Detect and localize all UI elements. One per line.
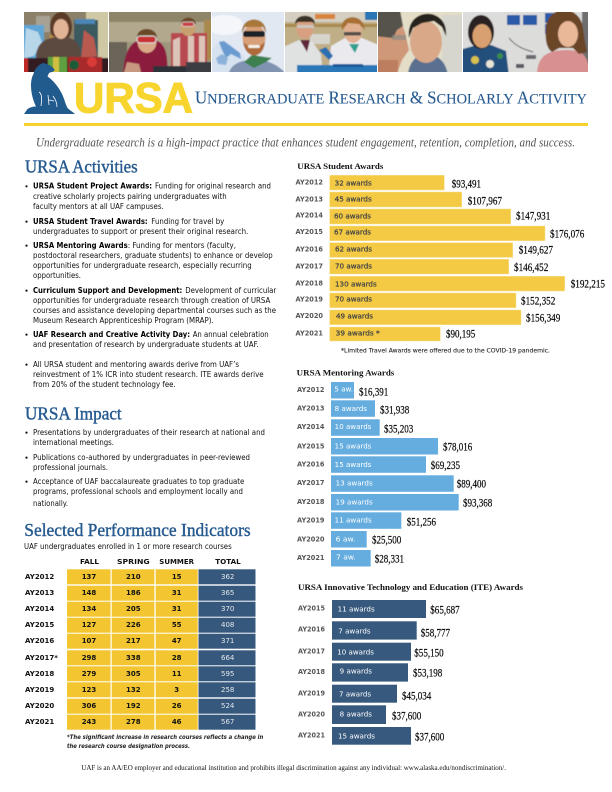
photo: lab researchers with pipette — [285, 12, 377, 72]
heading: Selected Performance Indicators: Selected Performance Indicators — [24, 520, 251, 540]
bullet: funding sources: reinvestment of 1% ICR into student research. ITE awards derive — [33, 370, 264, 379]
bar AY2013: 8 awards — [335, 405, 367, 413]
table row AY2020: AY2020 — [25, 702, 54, 710]
photo: two students at research poster — [463, 12, 588, 72]
bullet: research and creative activity day: and presentation of research by undergraduate students at UAF. — [33, 340, 259, 349]
table row AY2016: 217 — [126, 637, 141, 645]
table row AY2016: 371 — [221, 637, 234, 645]
bullet: acceptance: Acceptance of UAF baccalaureate graduates to top graduate — [33, 477, 245, 486]
bar AY2016: AY2016 — [298, 626, 325, 634]
bar AY2018 — [297, 494, 492, 510]
table row AY2017 — [25, 650, 256, 665]
bar AY2018 — [296, 276, 605, 291]
table row AY2020: 306 — [82, 702, 96, 710]
table row AY2018: 305 — [126, 670, 141, 678]
bar AY2017: 70 awards — [335, 262, 372, 270]
bullet: student project awards: creative scholarly projects pairing undergraduates with — [33, 192, 227, 201]
table row AY2015: 408 — [221, 621, 234, 629]
table row AY2014 — [25, 602, 256, 617]
table row AY2015: AY2015 — [25, 621, 54, 629]
table row AY2018: 279 — [82, 670, 96, 678]
table row AY2016: 107 — [82, 637, 96, 645]
icon: bear silhouette — [24, 63, 75, 114]
subheading: UAF undergraduates enrolled in 1 or more research courses — [24, 542, 232, 551]
bar AY2015: $65,687 — [430, 603, 460, 617]
wordmark: URSA: URSA — [74, 74, 193, 122]
bar AY2015: 11 awards — [338, 605, 375, 613]
bar AY2017 — [296, 259, 548, 274]
bar AY2014: $35,203 — [384, 422, 413, 436]
bullet: curriculum support: Museum Research Apprenticeship Program (MRAP). — [33, 316, 214, 325]
table column headers: SPRING — [117, 558, 150, 566]
bar AY2017: $55,150 — [414, 645, 444, 659]
table row AY2016 — [25, 634, 256, 649]
bullet: publications: Publications co-authored by undergraduates in peer-reviewed — [33, 453, 250, 462]
table row AY2018: 595 — [221, 670, 234, 678]
table row AY2012: 137 — [82, 573, 96, 581]
bar AY2013: AY2013 — [297, 404, 325, 412]
table row AY2012: 210 — [126, 573, 141, 581]
bullet: acceptance — [25, 477, 245, 508]
bar AY2014 — [297, 419, 413, 436]
bar AY2016: 62 awards — [335, 245, 372, 253]
bullet: mentoring awards: opportunities. — [33, 271, 81, 280]
bar AY2021: $28,331 — [375, 552, 404, 566]
table row AY2021: 278 — [126, 718, 141, 726]
bullet: student travel awards — [25, 217, 248, 236]
table row AY2020: 26 — [172, 702, 182, 710]
bar AY2021: AY2021 — [297, 554, 325, 562]
table row AY2015: 127 — [82, 621, 96, 629]
panel: URSA Activities — [25, 157, 277, 389]
bar AY2013 — [296, 192, 502, 208]
bar AY2014: $147,931 — [516, 208, 550, 222]
bar AY2017: 10 awards — [337, 648, 374, 656]
bar AY2016: $69,235 — [431, 458, 460, 472]
table row AY2016: 47 — [172, 637, 182, 645]
bullet: presentations: Presentations by undergraduates of their research at national and — [33, 428, 265, 437]
title: Undergraduate Research & Scholarly Activity: UNDERGRADUATE RESEARCH & SCHOLARLY ACTIVITY — [195, 88, 587, 108]
bar AY2012: 5 aw. — [334, 385, 353, 393]
bullet: curriculum support: Development of curricular — [185, 286, 277, 295]
table row AY2021 — [25, 715, 256, 730]
bullet: presentations: international meetings. — [33, 438, 114, 447]
bar AY2015: AY2015 — [297, 442, 325, 450]
bar AY2021: 39 awards * — [336, 329, 380, 337]
bullet: funding sources: from 20% of the student technology fee. — [33, 380, 176, 389]
bar AY2019: 70 awards — [335, 295, 372, 303]
bar AY2016: AY2016 — [297, 460, 325, 468]
bar AY2015: $176,076 — [550, 227, 584, 241]
bar AY2020: $156,349 — [526, 310, 560, 324]
bullet: curriculum support: courses and assistance developing departmental courses such as the — [33, 306, 276, 315]
table row AY2014: 31 — [172, 605, 182, 613]
chart title: URSA Student Awards — [297, 161, 384, 171]
bar AY2016 — [297, 456, 460, 473]
bullet: acceptance: nationally. — [33, 499, 68, 508]
bar AY2018: AY2018 — [297, 498, 325, 506]
bar AY2015: $78,016 — [443, 440, 472, 454]
bar AY2019: 11 awards — [335, 516, 372, 524]
table row AY2016: AY2016 — [25, 637, 54, 645]
table row AY2020: 524 — [221, 702, 235, 710]
panel: Selected Performance Indicators — [24, 520, 264, 750]
heading: URSA Impact: URSA Impact — [25, 403, 122, 423]
bullet: student travel awards: Funding for travel by — [151, 217, 225, 226]
bar AY2013: AY2013 — [296, 195, 323, 203]
table row AY2012: AY2012 — [25, 573, 54, 581]
bar AY2014: 60 awards — [334, 212, 371, 220]
table row AY2014: 205 — [126, 605, 141, 613]
bar AY2017: 13 awards — [336, 479, 373, 487]
bar AY2018 — [298, 663, 442, 682]
bar AY2021: AY2021 — [296, 329, 323, 337]
panel: URSA Impact — [25, 403, 265, 508]
photo: man in sunglasses with snowy mountain — [212, 12, 284, 72]
bullet: student project awards — [25, 182, 271, 211]
table row AY2014: 134 — [82, 605, 96, 613]
bar AY2017 — [298, 643, 444, 661]
chart: URSA Mentoring Awards — [297, 367, 492, 566]
table row AY2013: AY2013 — [25, 589, 54, 597]
chart title: URSA Mentoring Awards — [297, 367, 395, 377]
bullet: research and creative activity day: An annual celebration — [193, 330, 269, 339]
table row AY2015 — [25, 618, 256, 633]
bar AY2019: $51,256 — [407, 514, 436, 528]
bar AY2014: AY2014 — [297, 423, 325, 431]
bar AY2016: $149,627 — [519, 243, 553, 257]
bar AY2020: 8 awards — [340, 710, 372, 718]
chart title: URSA Innovative Technology and Education (ITE) Awards — [298, 582, 524, 592]
bar AY2019: $45,034 — [402, 688, 431, 702]
table row AY2015: 55 — [172, 621, 182, 629]
bar AY2013 — [297, 400, 409, 417]
bar AY2016: $58,777 — [421, 625, 450, 639]
table row AY2017: 298 — [82, 654, 96, 662]
table row AY2013: 365 — [221, 589, 234, 597]
bar AY2018: 19 awards — [336, 498, 373, 506]
table row AY2017: 664 — [221, 654, 235, 662]
bar AY2013: $107,967 — [468, 194, 502, 208]
bullet: mentoring awards: opportunities for undergraduate research, especially recurring — [33, 261, 252, 270]
bar AY2015: AY2015 — [296, 228, 323, 236]
bar AY2018: $53,198 — [413, 665, 442, 679]
bar AY2019: AY2019 — [297, 516, 325, 524]
table row AY2018: 11 — [172, 670, 182, 678]
bar AY2021 — [298, 727, 444, 745]
bar AY2021: $90,195 — [446, 327, 475, 341]
table row AY2013: 186 — [126, 589, 141, 597]
chart: URSA Innovative Technology and Education Awards — [298, 582, 524, 745]
bar AY2015: AY2015 — [298, 604, 325, 612]
bar AY2017: $89,400 — [457, 477, 486, 491]
bullet: student travel awards: URSA Student Travel Awards: — [33, 217, 148, 226]
table row AY2019 — [25, 682, 256, 697]
bar AY2018: AY2018 — [298, 668, 325, 676]
bar AY2019: 7 awards — [339, 690, 371, 698]
bullet: presentations — [25, 428, 265, 447]
photo: student artist with paintings — [24, 12, 108, 72]
bar AY2016: AY2016 — [296, 245, 323, 253]
bar AY2018: 9 awards — [340, 667, 372, 675]
table row AY2014: AY2014 — [25, 605, 54, 613]
bar AY2020: AY2020 — [297, 535, 325, 543]
table row AY2015: 226 — [126, 621, 141, 629]
bar AY2012: AY2012 — [296, 178, 323, 186]
divider rule — [24, 123, 588, 126]
table footnote — [67, 733, 264, 750]
photo: mentor and student in conversation — [378, 12, 462, 72]
bar AY2018: $93,368 — [463, 496, 492, 510]
table column headers: FALL — [80, 558, 100, 566]
bullet: curriculum support: opportunities for undergraduate research through creation of URSA — [33, 296, 271, 305]
bar AY2021 — [296, 327, 475, 341]
table row AY2020: 192 — [126, 702, 141, 710]
bar AY2015 — [297, 438, 472, 454]
chart footnote: *Limited Travel Awards were offered due to the COVID-19 pandemic. — [341, 347, 550, 355]
bar AY2016 — [296, 243, 553, 257]
table footnote: *The significant increase in research courses reflects a change in — [67, 733, 264, 741]
table row AY2017: AY2017* — [25, 654, 58, 662]
bar AY2015: 15 awards — [335, 442, 372, 450]
photo strip — [24, 12, 588, 72]
table column headers — [80, 558, 241, 566]
bar AY2016: 7 awards — [338, 627, 371, 635]
bullet: mentoring awards: URSA Mentoring Awards — [33, 241, 128, 250]
bar AY2020 — [297, 531, 401, 548]
bullet: research and creative activity day — [25, 330, 269, 349]
bar AY2021: AY2021 — [298, 731, 325, 739]
bar AY2017: AY2017 — [298, 647, 325, 655]
table row AY2013: 148 — [82, 589, 96, 597]
table row AY2019: 132 — [126, 686, 141, 694]
bar AY2016: 15 awards — [335, 461, 372, 469]
bullet: acceptance: programs, professional schools and employment locally and — [33, 487, 243, 496]
table row AY2021: AY2021 — [25, 718, 54, 726]
table row AY2012 — [25, 569, 256, 584]
bullet: publications — [25, 453, 250, 472]
table row AY2014: 370 — [221, 605, 234, 613]
bar AY2013: 45 awards — [335, 195, 372, 203]
table column headers: SUMMER — [159, 558, 195, 566]
table row AY2018: AY2018 — [25, 670, 54, 678]
table row AY2021: 243 — [82, 718, 96, 726]
bar AY2014 — [296, 208, 550, 224]
bar AY2014: AY2014 — [296, 211, 323, 219]
bar AY2019 — [298, 685, 431, 703]
table row AY2019: AY2019 — [25, 686, 54, 694]
table row AY2021: 567 — [221, 718, 234, 726]
footer: non-discrimination statement: UAF is an AA/EO employer and educational institution and prohibits illegal discrimination against any individual: www.alaska.edu/nondiscrimination/. — [81, 763, 506, 772]
bar AY2012: AY2012 — [297, 386, 325, 394]
heading: URSA Activities: URSA Activities — [25, 157, 138, 177]
table row AY2019: 3 — [174, 686, 179, 694]
bar AY2021 — [297, 550, 404, 566]
bar AY2020 — [296, 310, 560, 325]
bar AY2020: $37,600 — [392, 708, 421, 722]
bullet: funding sources: All URSA student and mentoring awards derive from UAF’s — [33, 360, 239, 369]
table row AY2021: 46 — [172, 718, 182, 726]
bar AY2020: AY2020 — [296, 312, 323, 320]
bullet: student project awards: Funding for original research and — [155, 182, 271, 190]
table row AY2019: 258 — [221, 686, 234, 694]
table row AY2017: 28 — [172, 654, 182, 662]
bar AY2017 — [297, 475, 486, 492]
bar AY2021: 7 aw. — [336, 553, 356, 561]
bar AY2018: 130 awards — [335, 280, 377, 288]
logo: URSA bear and wordmark — [24, 63, 193, 122]
bar AY2016 — [298, 621, 450, 640]
bar AY2012: 32 awards — [335, 179, 372, 187]
bullet: funding sources — [25, 360, 264, 389]
bar AY2019: AY2019 — [298, 689, 325, 697]
bar AY2021: 15 awards — [338, 732, 375, 740]
bar AY2021: $37,600 — [415, 729, 444, 743]
table row AY2017: 338 — [126, 654, 141, 662]
bar AY2017: AY2017 — [297, 479, 325, 487]
bar AY2017: $146,452 — [514, 260, 548, 274]
bullet: mentoring awards: : Funding for mentors (faculty, — [128, 241, 236, 250]
table row AY2019: 123 — [82, 686, 96, 694]
bar AY2018: AY2018 — [296, 279, 323, 287]
bullet: curriculum support — [25, 286, 277, 325]
table footnote: the research course designation process. — [67, 742, 190, 750]
table row AY2012: 15 — [172, 573, 182, 581]
bar AY2020: 49 awards — [336, 312, 373, 320]
bar AY2012 — [296, 175, 481, 190]
table row AY2018 — [25, 666, 256, 681]
bullet: mentoring awards — [25, 241, 273, 280]
bar AY2015 — [298, 600, 460, 618]
bar AY2020: 6 aw. — [336, 535, 355, 543]
bar AY2012 — [297, 382, 388, 399]
bar AY2019: $152,352 — [521, 294, 555, 308]
table row AY2012: 362 — [221, 573, 234, 581]
bar AY2019 — [297, 512, 436, 529]
photo: two students in goggles — [109, 12, 211, 72]
table row AY2013: 31 — [172, 589, 182, 597]
bar AY2015: 67 awards — [334, 228, 371, 236]
bar AY2017: AY2017 — [296, 262, 323, 270]
bullet: mentoring awards: postdoctoral researchers, graduate students) to enhance or develop — [33, 251, 273, 260]
bullet: student project awards: URSA Student Project Awards: — [33, 182, 152, 190]
bar AY2015 — [296, 226, 584, 241]
table row AY2013 — [25, 586, 256, 601]
bullet: curriculum support: Curriculum Support and Development: — [33, 286, 182, 295]
bar AY2014: 10 awards — [335, 423, 372, 431]
bullet: student travel awards: undergraduates to support or present their original research. — [33, 227, 248, 236]
bullet: research and creative activity day: UAF Research and Creative Activity Day: — [33, 330, 190, 339]
bar AY2019: AY2019 — [296, 295, 323, 303]
bar AY2012: $16,391 — [359, 385, 388, 399]
table row AY2020 — [25, 699, 256, 714]
bar AY2012: $93,491 — [452, 176, 481, 190]
bar AY2020: $25,500 — [372, 533, 401, 547]
bar AY2013: $31,938 — [380, 403, 409, 417]
bar AY2020: AY2020 — [298, 710, 325, 718]
table column headers: TOTAL — [215, 558, 241, 566]
chart: URSA Student Awards — [296, 161, 605, 355]
bullet: student project awards: faculty mentors at all UAF campuses. — [33, 202, 164, 211]
bar AY2019 — [296, 293, 555, 308]
bullet: publications: professional journals. — [33, 463, 108, 472]
bar AY2020 — [298, 705, 421, 724]
